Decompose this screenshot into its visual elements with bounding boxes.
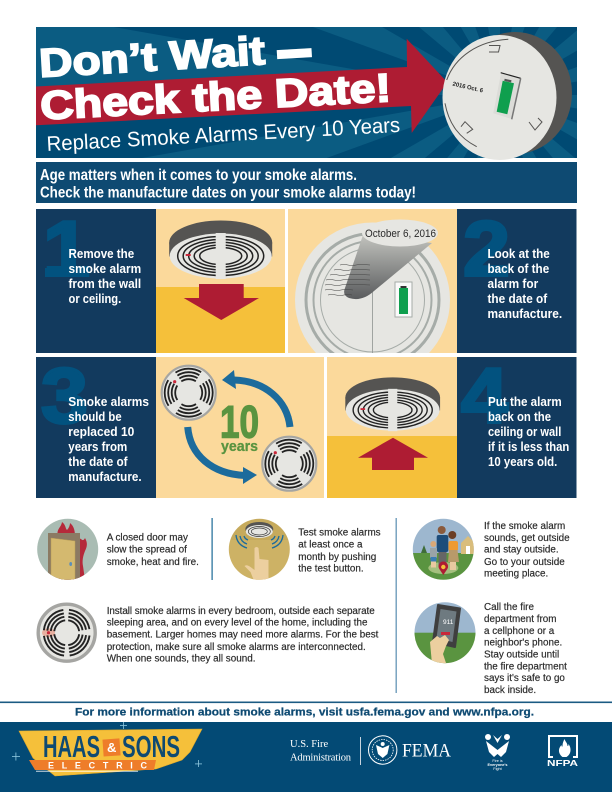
install text: When one sounds, they all sound. xyxy=(107,654,255,665)
panel: step 2 xyxy=(288,209,576,353)
arrow down xyxy=(184,284,259,320)
step 2 text: the date of xyxy=(488,291,548,306)
icon: testing the alarm xyxy=(228,518,292,582)
install text: protection, make sure all smoke alarms are interconnected. xyxy=(107,642,366,653)
arrow up xyxy=(358,438,428,470)
logo: U.S. Fire Administration: Administration xyxy=(290,752,352,764)
step 2 text: alarm for xyxy=(488,276,538,291)
logo: U.S. Fire Administration xyxy=(290,739,352,764)
intro band: Age matters when it comes to your smoke alarms. xyxy=(40,167,357,184)
icon: family outside xyxy=(412,518,476,583)
icon: old alarm xyxy=(255,430,323,498)
logo: NFPA: NFPA xyxy=(547,758,578,768)
cycle arrow top xyxy=(222,370,290,427)
icon: alarm back with date xyxy=(442,32,572,160)
icon: new alarm xyxy=(155,359,223,427)
title: Don’t Wait xyxy=(38,29,266,86)
logo: Fire is Everyone's Fight: Fire is xyxy=(492,759,503,763)
step 3 text: manufacture. xyxy=(68,469,142,484)
logo: Fire is Everyone's Fight: Everyone's xyxy=(487,763,508,767)
icon: phone call: 911 xyxy=(443,619,454,626)
step 1 text: or ceiling. xyxy=(68,291,121,306)
logo: Haas and Sons Electric: & xyxy=(107,740,116,755)
icon: install alarm xyxy=(38,604,95,661)
title: Check the Date! xyxy=(39,66,392,128)
step 1 text: Remove the xyxy=(68,246,134,261)
step 3 text: the date of xyxy=(68,454,128,469)
step 3 text: Smoke alarms xyxy=(68,394,149,409)
call text: a cellphone or a xyxy=(484,626,555,637)
icon: alarm back closeup: October 6, 2016 xyxy=(365,228,436,240)
install text: basement. Larger homes may need more alarms. For the best xyxy=(107,630,379,641)
panel: step 3 xyxy=(36,352,324,498)
header banner xyxy=(36,27,577,158)
footer band xyxy=(0,722,612,792)
step 4 text: ceiling or wall xyxy=(488,424,561,439)
step 4 text: if it is less than xyxy=(488,439,569,454)
call text: department from xyxy=(484,614,556,625)
step 3 text: replaced 10 xyxy=(68,424,134,439)
icon: alarm back with date: 2016 Oct. 6 xyxy=(452,82,484,95)
icon: alarm side view xyxy=(169,220,272,279)
logo: Fire is Everyone's Fight: Fight xyxy=(493,767,503,771)
step number 1: 1 xyxy=(43,204,90,292)
test text: Test smoke alarms xyxy=(298,528,381,539)
FEMA wordmark: FEMA xyxy=(402,741,451,762)
icon: alarm back closeup xyxy=(295,220,450,353)
10 years label: 10 xyxy=(220,396,259,448)
call text: Stay outside until xyxy=(484,650,559,661)
test text: at least once a xyxy=(298,540,363,551)
step number 3: 3 xyxy=(41,352,88,440)
subtitle: Replace Smoke Alarms Every 10 Years xyxy=(46,114,401,156)
step 1 text: smoke alarm xyxy=(68,261,141,276)
logo: U.S. Fire Administration: U.S. Fire xyxy=(290,739,329,750)
icon: door and fire xyxy=(36,518,100,582)
outside text: and stay outside. xyxy=(484,545,559,556)
closed door text: A closed door may xyxy=(107,533,188,544)
closed door text: slow the spread of xyxy=(107,545,187,556)
step 3 text xyxy=(68,394,149,484)
test text: month by pushing xyxy=(298,552,376,563)
step 3 text: years from xyxy=(68,439,127,454)
install text: Install smoke alarms in every bedroom, outside each separate xyxy=(107,606,375,617)
logo: Fire is Everyone's Fight xyxy=(485,734,510,771)
install text: sleeping area, and on every level of the home, including the xyxy=(107,618,368,629)
logo: Haas and Sons Electric: ELECTRIC xyxy=(48,760,148,770)
intro band xyxy=(36,162,577,203)
outside text: If the smoke alarm xyxy=(484,521,565,532)
step 1 text xyxy=(68,246,141,306)
red arrow xyxy=(36,39,447,133)
footer info line: For more information about smoke alarms, visit usfa.fema.gov and www.nfpa.org. xyxy=(75,707,534,719)
sunburst rays xyxy=(36,27,577,158)
closed door text: smoke, heat and fire. xyxy=(107,557,199,568)
logo: Haas and Sons Electric: HAAS xyxy=(43,729,100,764)
step 2 text: Look at the xyxy=(488,246,550,261)
logo: Haas and Sons Electric xyxy=(12,722,202,776)
call text: Call the fire xyxy=(484,602,534,613)
panel: step 1 xyxy=(36,204,285,353)
step number 4: 4 xyxy=(461,352,508,440)
outside text: meeting place. xyxy=(484,569,548,580)
10 years label xyxy=(220,396,259,455)
step 4 text: 10 years old. xyxy=(488,454,557,469)
step 3 text: should be xyxy=(68,409,122,424)
call text: back inside. xyxy=(484,685,536,696)
title xyxy=(38,27,392,128)
logo: NFPA xyxy=(547,736,578,768)
outside text: sounds, get outside xyxy=(484,533,570,544)
step 2 text: manufacture. xyxy=(488,306,562,321)
icon: phone call xyxy=(414,602,476,666)
logo: FEMA seal xyxy=(368,736,397,764)
intro band: Check the manufacture dates on your smoke alarms today! xyxy=(40,184,416,202)
title: — xyxy=(277,27,311,74)
panel: step 4 xyxy=(327,352,576,498)
step number 2: 2 xyxy=(463,204,510,292)
step 2 text xyxy=(488,246,562,321)
call text: the fire department xyxy=(484,662,567,673)
test text: the test button. xyxy=(298,564,364,575)
cycle arrow bottom xyxy=(188,427,257,484)
call text: neighbor's phone. xyxy=(484,638,562,649)
10 years label: years xyxy=(221,438,258,455)
call text: says it's safe to go xyxy=(484,673,565,684)
step 1 text: from the wall xyxy=(68,276,141,291)
step 4 text: back on the xyxy=(488,409,551,424)
step 4 text: Put the alarm xyxy=(488,394,562,409)
outside text: Go to your outside xyxy=(484,557,565,568)
step 2 text: back of the xyxy=(488,261,549,276)
logo: Haas and Sons Electric: SONS xyxy=(122,729,180,764)
icon: alarm side view xyxy=(345,377,440,431)
step 4 text xyxy=(488,394,569,469)
